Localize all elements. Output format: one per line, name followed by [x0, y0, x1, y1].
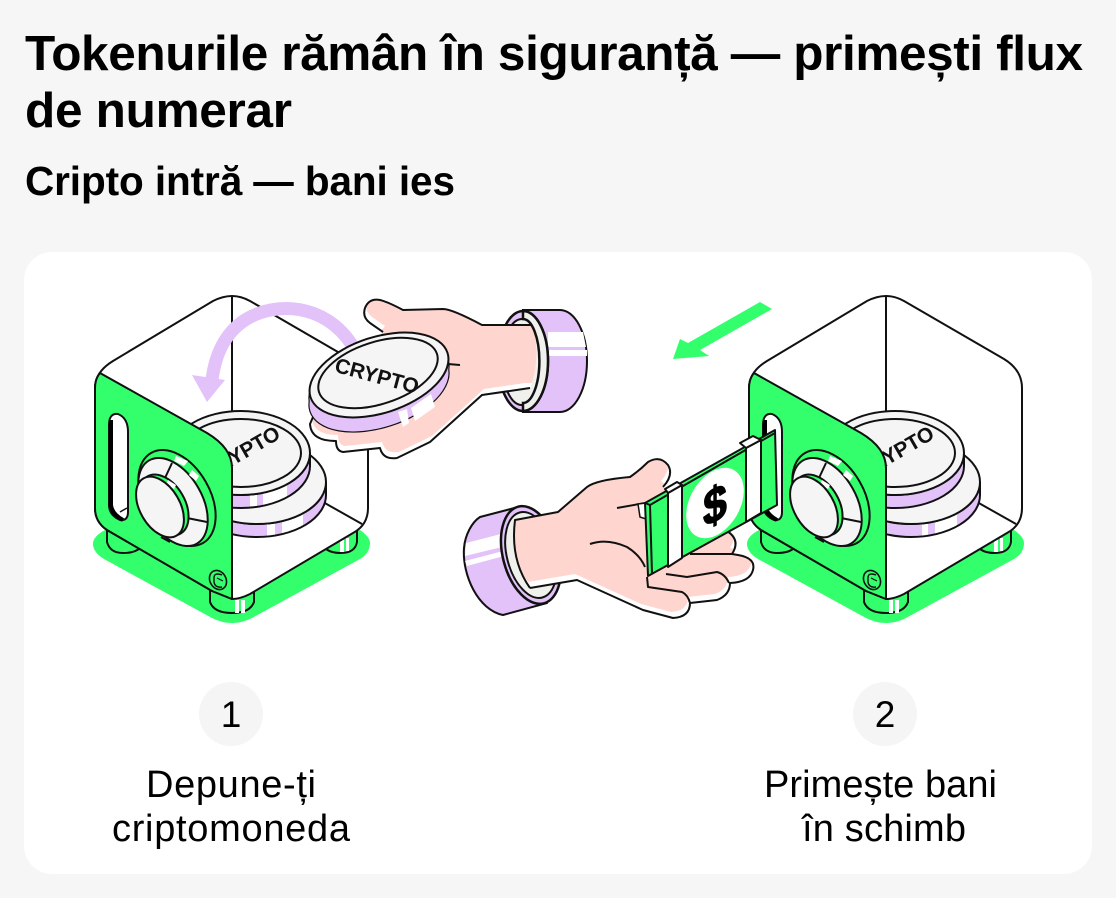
illustration: hand receiving money: [464, 430, 777, 618]
hand: [514, 459, 753, 618]
step 1 label: [112, 764, 351, 850]
title: de numerar: [25, 83, 292, 138]
top coin: [191, 410, 311, 509]
lower coin: [887, 454, 981, 538]
step 1 label: criptomoneda: [112, 808, 351, 850]
panel: steps card: [24, 252, 1092, 874]
hand: [310, 300, 536, 458]
top coin: [826, 411, 964, 508]
step 2 label: în schimb: [801, 808, 966, 850]
safe door slot: [763, 414, 782, 520]
step number 2: [853, 682, 917, 746]
step number 1: [199, 682, 263, 746]
step 2 label: [764, 764, 997, 850]
step number 1: 1: [221, 694, 241, 735]
step 2: [764, 682, 997, 850]
arrow: green pointing to hand: [673, 302, 772, 359]
arrow: curved purple into safe: [192, 308, 352, 402]
top coin: CRYPTO: [853, 422, 938, 484]
banknote: [645, 430, 777, 576]
cuff: [498, 310, 587, 412]
title: [25, 26, 1083, 138]
title: Tokenurile rămân în siguranță — primești flux: [25, 26, 1083, 81]
cuff: [464, 499, 571, 615]
top coin: CRYPTO: [199, 422, 284, 484]
illustration: hand holding crypto coin: [299, 294, 587, 458]
subtitle: Cripto intră — bani ies: [25, 158, 455, 204]
cuff ring front: [523, 311, 548, 411]
lower coin: [233, 454, 327, 538]
step 1: [112, 682, 351, 850]
illustration: second safe with crypto coins: [747, 296, 1024, 623]
coin in hand: CRYPTO: [332, 354, 421, 399]
safe door slot: [109, 414, 128, 520]
illustration: safe with crypto coins: [93, 296, 370, 623]
step number 2: 2: [875, 694, 895, 735]
step 1 label: Depune-ți: [146, 764, 316, 806]
coin in hand: [299, 317, 459, 447]
step 2 label: Primește bani: [764, 764, 997, 806]
banknote: $: [703, 472, 727, 539]
